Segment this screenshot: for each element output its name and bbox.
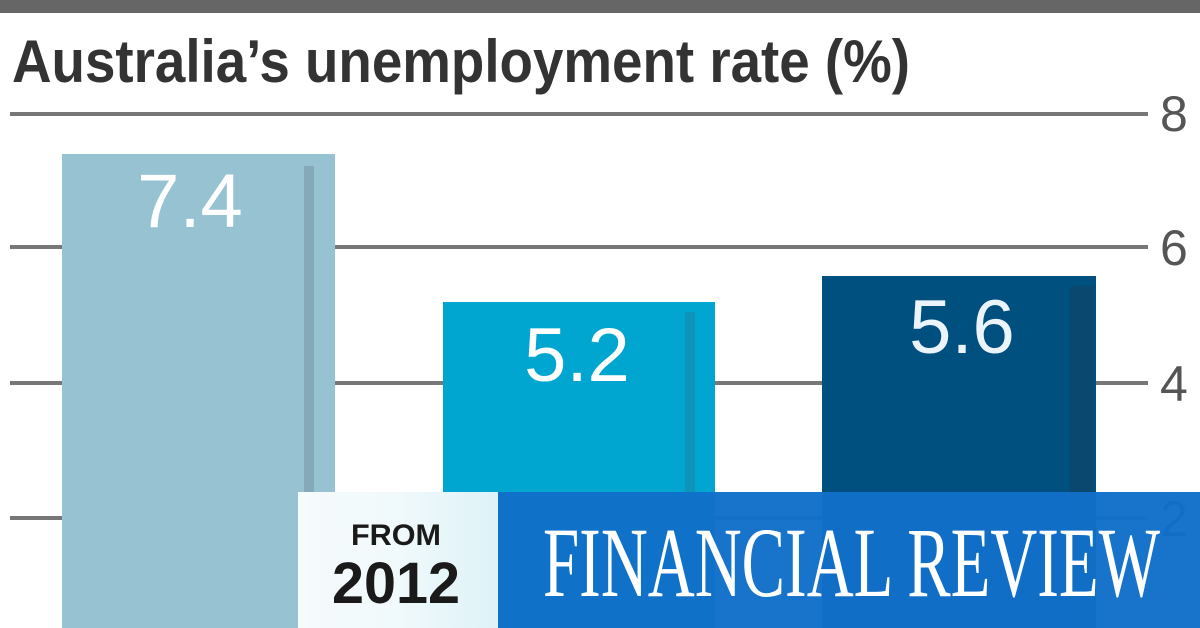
- badge: from 2012: [298, 492, 498, 628]
- y-axis labels: 2: [1160, 491, 1188, 547]
- bar 5.6: 5.6: [909, 285, 1015, 370]
- top bar: [0, 0, 1200, 13]
- bar 7.4: 7.4: [137, 159, 243, 244]
- y-axis labels: 8: [1160, 86, 1188, 142]
- badge: from 2012: 2012: [332, 551, 460, 616]
- y-axis labels: [1160, 86, 1188, 547]
- bar 5.2: [443, 302, 715, 628]
- bar 5.2: 5.2: [524, 313, 630, 398]
- badge: from 2012: FROM: [351, 519, 441, 552]
- title: Australia’s unemployment rate (%): [12, 28, 910, 95]
- y-axis labels: 4: [1160, 356, 1188, 412]
- bar 7.4: [62, 154, 335, 628]
- bar 5.6: [822, 276, 1096, 628]
- y-axis labels: 6: [1160, 220, 1188, 276]
